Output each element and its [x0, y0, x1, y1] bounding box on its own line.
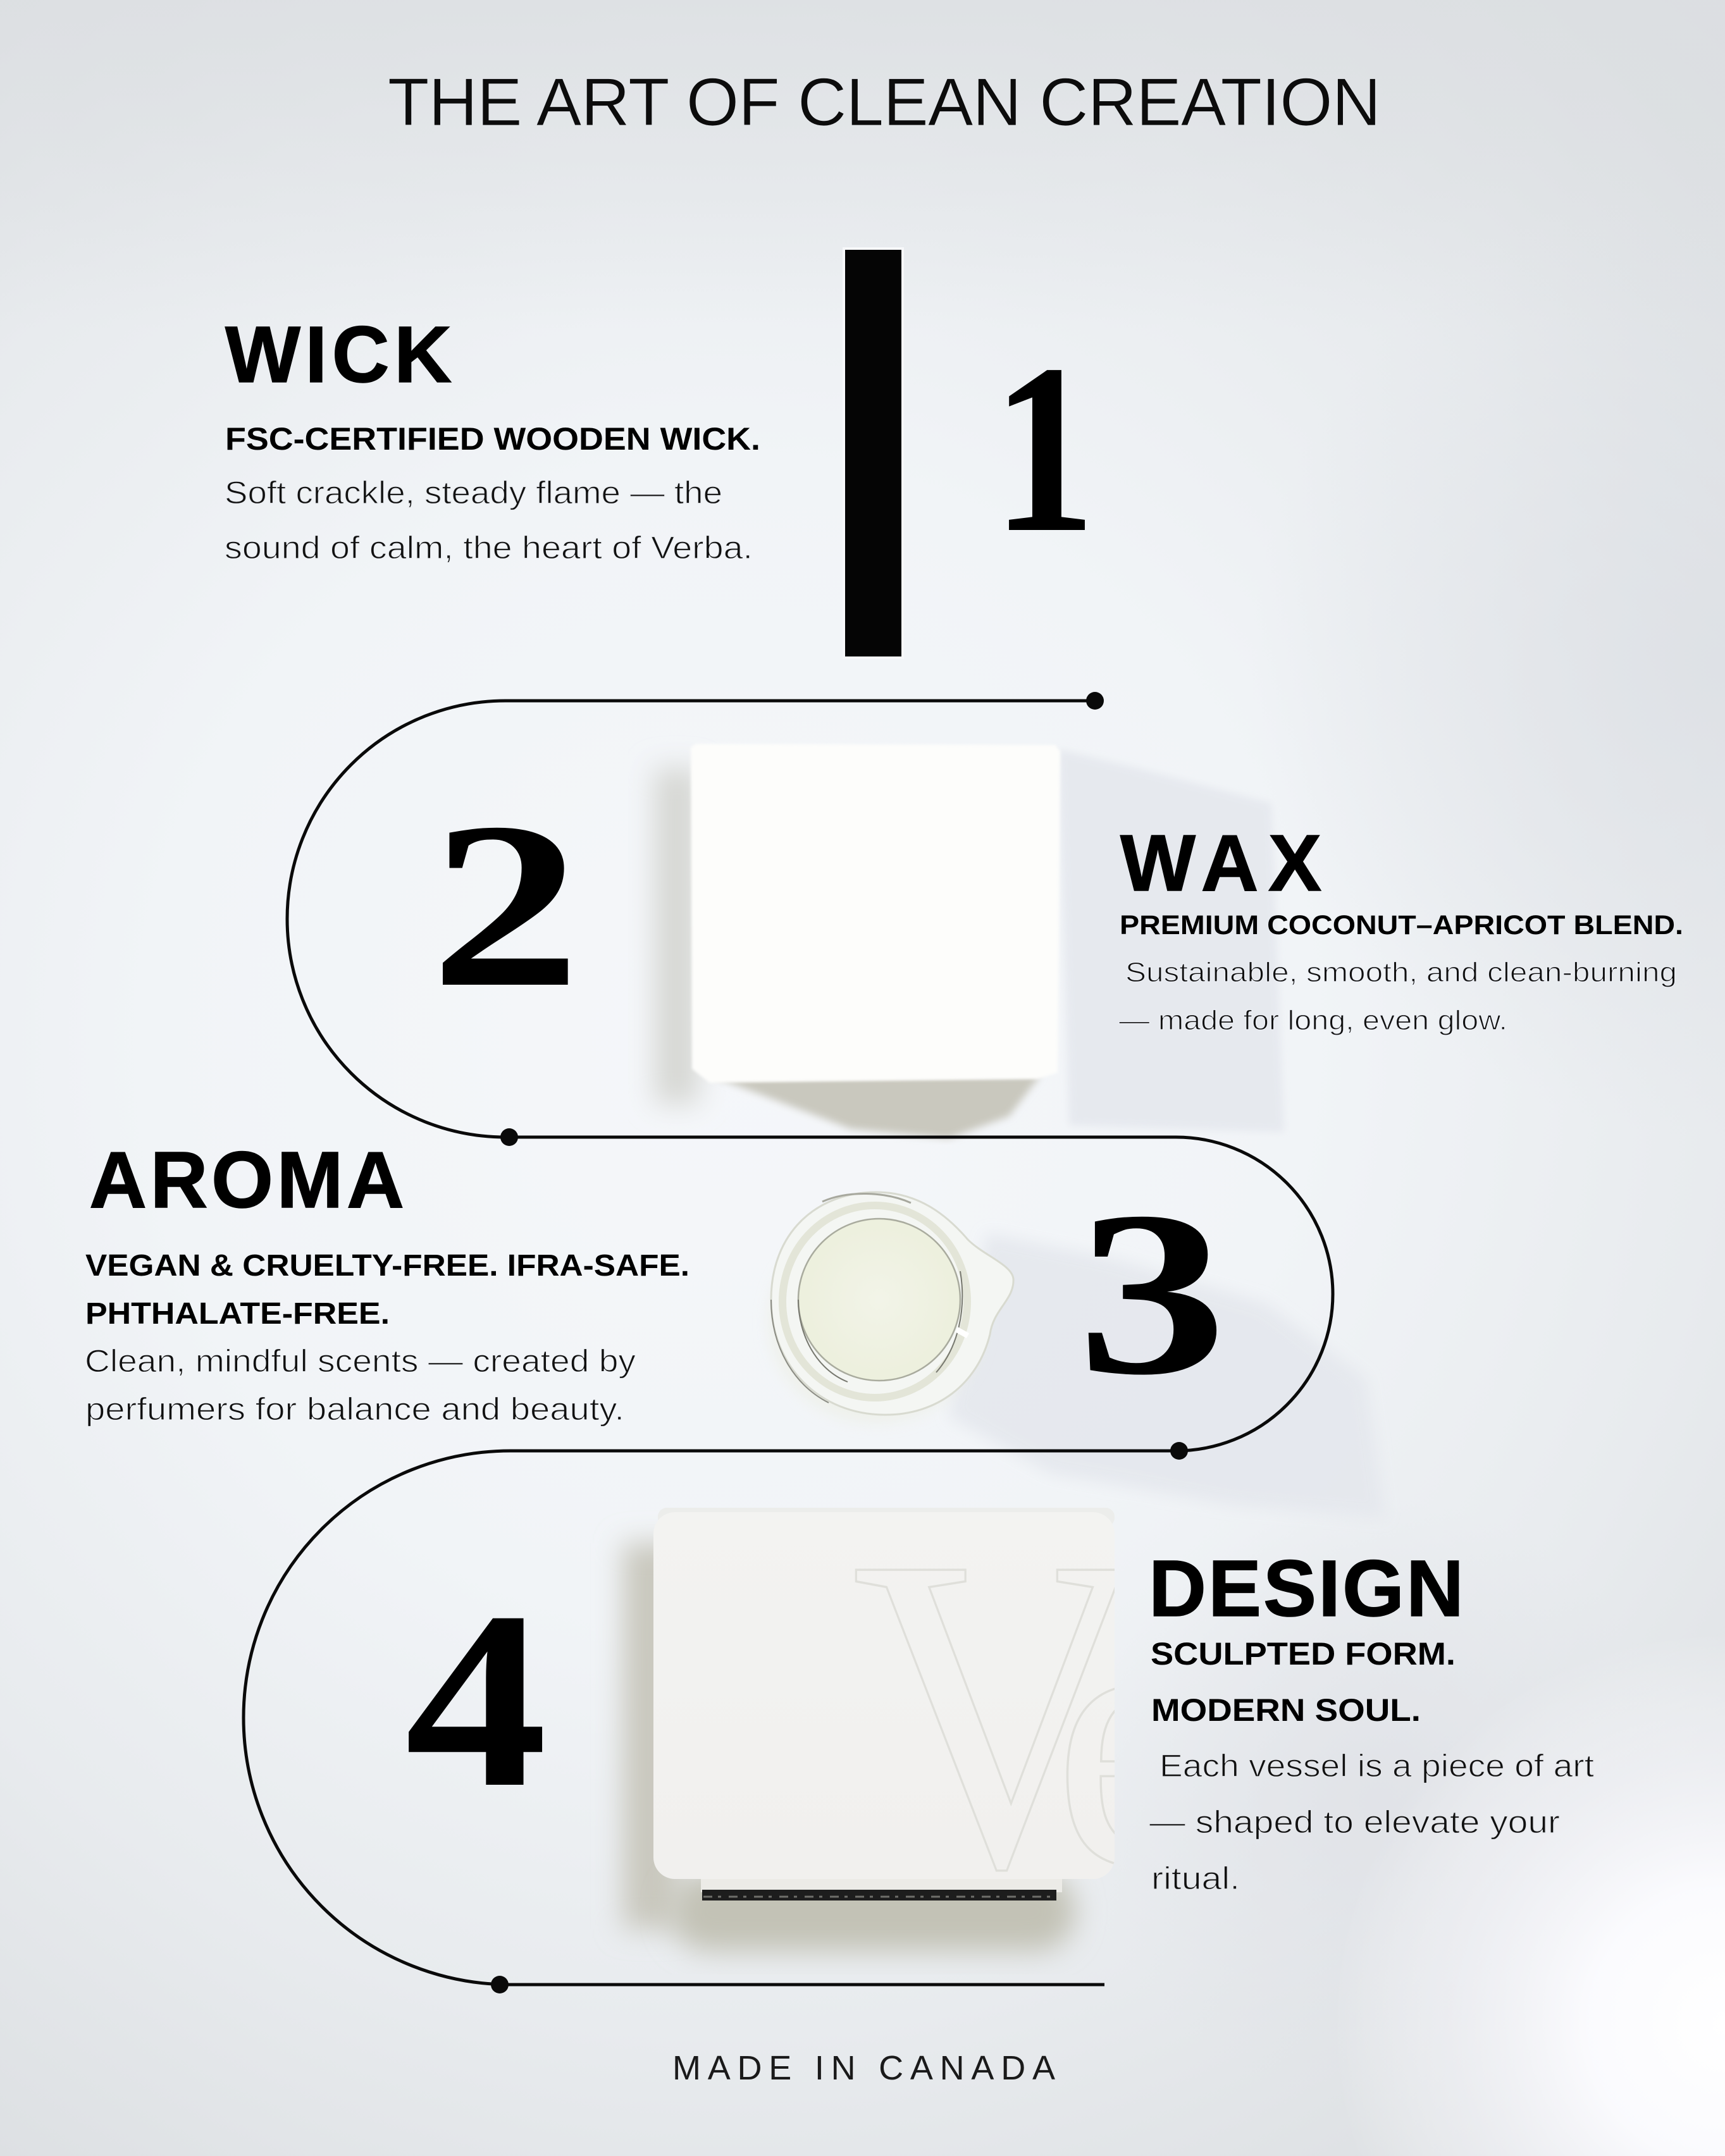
number 1: 1 [992, 314, 1096, 582]
icon: glass beaker of fragrance oil [769, 1192, 1013, 1423]
embossed letters [855, 1568, 1115, 1872]
wick description [225, 475, 753, 565]
wick subtitle: FSC-CERTIFIED WOODEN WICK. [225, 421, 760, 457]
heading: aroma: AROMA [89, 1135, 404, 1224]
design description: — shaped to elevate your [1149, 1804, 1560, 1840]
title: THE ART OF CLEAN CREATION [388, 64, 1381, 140]
aroma description [85, 1343, 636, 1427]
icon: wooden wick [843, 247, 904, 659]
connector line: wick to wax [287, 692, 1176, 1146]
panel: wick text [225, 310, 760, 565]
wick description: sound of calm, the heart of Verba. [225, 530, 753, 565]
design description [1149, 1748, 1594, 1896]
design description: ritual. [1151, 1861, 1240, 1896]
vessel base strip [702, 1890, 1056, 1900]
icon: sculpted white vessel [623, 1463, 1221, 1961]
design description: Each vessel is a piece of art [1159, 1748, 1594, 1783]
wick description: Soft crackle, steady flame — the [225, 475, 722, 510]
aroma subtitle: PHTHALATE-FREE. [85, 1297, 390, 1331]
aroma description: perfumers for balance and beauty. [85, 1391, 624, 1427]
icon: wax block [655, 744, 1284, 1138]
aroma subtitle: VEGAN & CRUELTY-FREE. IFRA-SAFE. [85, 1249, 689, 1283]
design subtitle: MODERN SOUL. [1151, 1692, 1421, 1728]
heading: wick: WICK [225, 310, 452, 399]
design subtitle: SCULPTED FORM. [1151, 1636, 1456, 1672]
heading: wax: WAX [1120, 818, 1321, 908]
aroma subtitle [85, 1249, 689, 1331]
panel: aroma text [85, 1135, 689, 1427]
connector line: aroma to design [244, 1451, 1104, 1993]
embossed letters: V [851, 1463, 1150, 1961]
wax description: Sustainable, smooth, and clean-burning [1125, 957, 1677, 988]
embossed letters: e [1053, 1525, 1221, 1946]
number 4: 4 [405, 1560, 547, 1840]
wax subtitle: PREMIUM COCONUT–APRICOT BLEND. [1120, 910, 1683, 940]
number 3: 3 [1077, 1162, 1227, 1423]
panel: wax text [1119, 818, 1683, 1036]
number 2: 2 [430, 773, 581, 1036]
footer: made in canada: MADE IN CANADA [672, 2049, 1055, 2087]
design subtitle [1151, 1636, 1456, 1728]
aroma description: Clean, mindful scents — created by [85, 1343, 636, 1379]
wax description: — made for long, even glow. [1119, 1005, 1507, 1036]
heading: design: DESIGN [1149, 1544, 1464, 1633]
connector line: wax to aroma [510, 1137, 1333, 1460]
wax description [1119, 957, 1677, 1036]
panel: design text [1149, 1544, 1594, 1896]
